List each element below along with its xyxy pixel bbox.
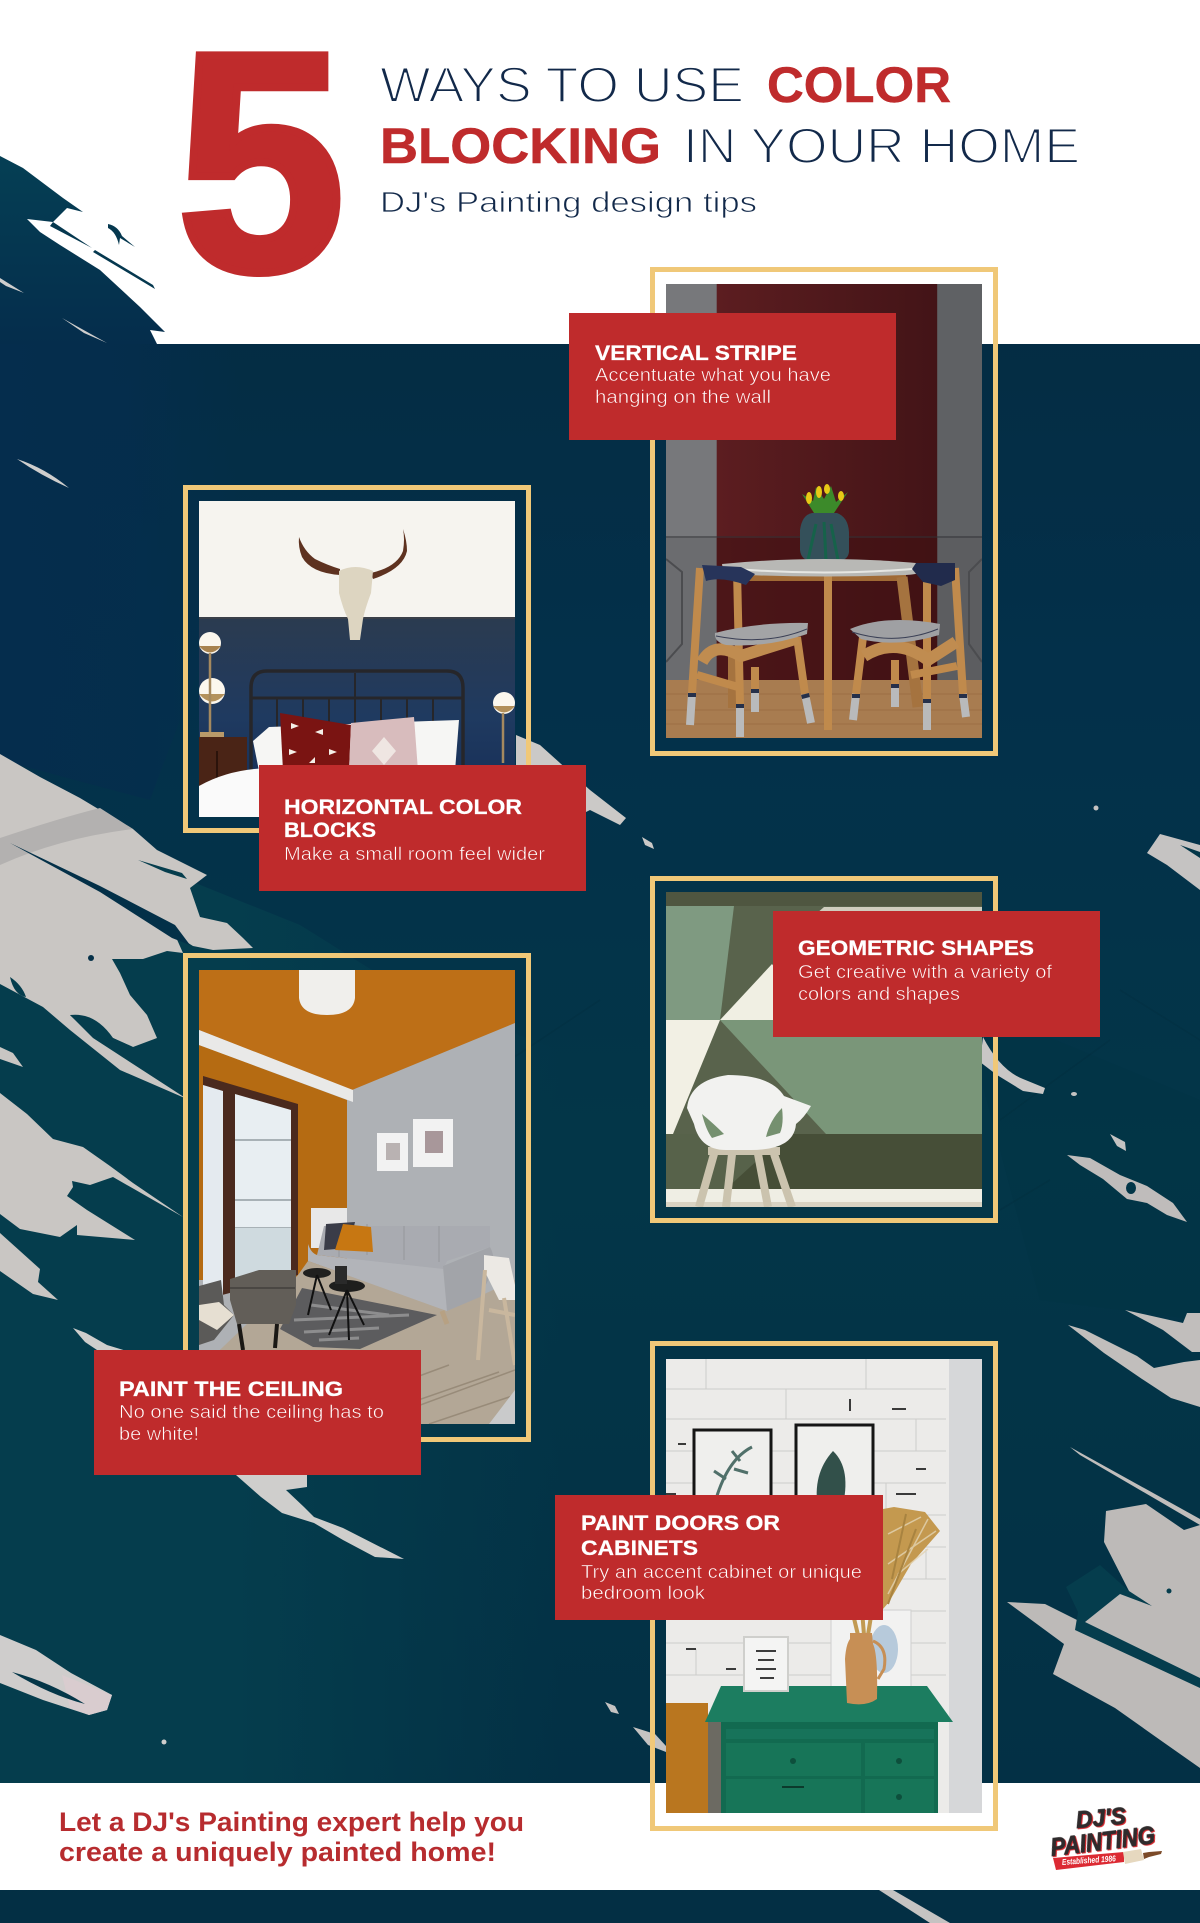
callout: paint doors or cabinets <box>555 1495 883 1620</box>
callout: paint the ceiling <box>94 1350 421 1475</box>
footer call to action: Let a DJ's Painting expert help you <box>59 1807 524 1837</box>
gold frame <box>652 1344 996 1828</box>
callout: horizontal color blocks: Make a small room feel wider <box>284 844 545 864</box>
gold frame <box>652 270 996 754</box>
photo: maroon stripe dining room <box>666 284 982 738</box>
gold frame <box>186 488 528 830</box>
callout: vertical stripe: hanging on the wall <box>595 387 771 407</box>
callout: geometric shapes: colors and shapes <box>798 984 960 1004</box>
title: BLOCKING <box>380 118 661 174</box>
title <box>380 57 1080 174</box>
callout: paint doors or cabinets: PAINT DOORS OR <box>581 1512 780 1535</box>
panel: vertical stripe <box>569 270 996 754</box>
callout: paint doors or cabinets: CABINETS <box>581 1537 698 1560</box>
photo: green cabinet against white brick <box>666 1359 982 1813</box>
callout: geometric shapes <box>773 911 1100 1037</box>
logo: DJ's Painting: Established 1986 <box>1062 1853 1116 1867</box>
callout: geometric shapes: GEOMETRIC SHAPES <box>798 937 1034 960</box>
logo: DJ's Painting: DJ'S <box>1075 1803 1127 1834</box>
photo: navy bedroom with skull <box>199 501 515 817</box>
header white band <box>0 0 1200 344</box>
callout: paint doors or cabinets: bedroom look <box>581 1583 706 1603</box>
callout: paint the ceiling: No one said the ceiling has to <box>119 1402 384 1422</box>
callout: paint the ceiling: PAINT THE CEILING <box>119 1378 343 1401</box>
callout: paint the ceiling: be white! <box>119 1424 199 1444</box>
panel: geometric shapes <box>652 878 1100 1220</box>
footer call to action: create a uniquely painted home! <box>59 1837 496 1867</box>
callout: vertical stripe: VERTICAL STRIPE <box>595 342 797 365</box>
photo: geometric green wall and white chair <box>666 892 982 1207</box>
callout: geometric shapes: Get creative with a variety of <box>798 962 1053 982</box>
callout: paint doors or cabinets: Try an accent cabinet or unique <box>581 1562 862 1582</box>
title: COLOR <box>767 57 951 113</box>
panel: paint doors or cabinets <box>555 1344 996 1828</box>
gold frame <box>186 956 528 1440</box>
callout: horizontal color blocks: BLOCKS <box>284 819 376 842</box>
footer call to action <box>59 1807 524 1867</box>
panel: horizontal color blocks <box>186 488 586 891</box>
logo: DJ's Painting <box>1049 1803 1162 1870</box>
photo: orange ceiling living room <box>199 970 515 1424</box>
gold frame <box>652 878 996 1220</box>
callout: horizontal color blocks: HORIZONTAL COLOR <box>284 796 522 819</box>
title: WAYS TO USE <box>380 57 744 113</box>
top-left navy brush stroke <box>0 156 165 344</box>
panel: paint the ceiling <box>94 956 528 1475</box>
subtitle: DJ's Painting design tips <box>380 187 757 219</box>
callout: horizontal color blocks <box>259 765 586 891</box>
callout: vertical stripe <box>569 313 896 440</box>
logo: DJ's Painting: PAINTING <box>1049 1821 1157 1862</box>
footer white band <box>0 1783 1200 1890</box>
callout: vertical stripe: Accentuate what you have <box>595 365 831 385</box>
title: IN YOUR HOME <box>683 118 1080 174</box>
